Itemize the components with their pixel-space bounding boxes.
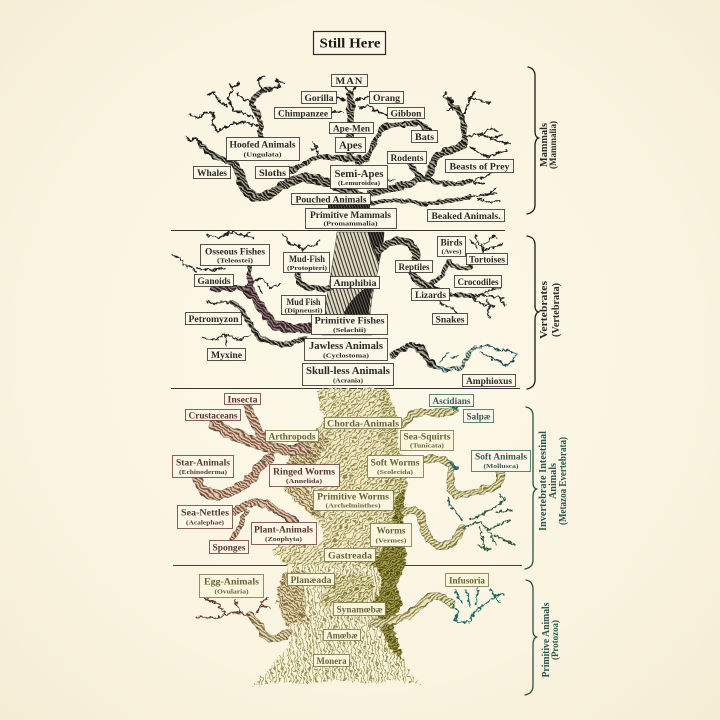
- trunk shading: top right: [368, 232, 384, 262]
- label: Amphioxus: Amphioxus: [466, 377, 512, 387]
- label: Ganoids: Ganoids: [198, 277, 231, 287]
- label: Rodents: [388, 152, 426, 164]
- label: Hoofed Animals: [226, 138, 300, 160]
- label: Soft Animals: (Mollusca): [484, 463, 518, 470]
- side label: protozoa: [541, 602, 560, 678]
- label: Birds: Birds: [440, 238, 463, 248]
- label: Mud-Fish: Mud-Fish: [289, 255, 326, 265]
- label: Beasts of Prey: [446, 160, 514, 172]
- label: Orang: [370, 92, 404, 104]
- label: Ringed Worms: [270, 464, 340, 486]
- label: Tortoises: Tortoises: [469, 256, 505, 266]
- label: Bats: [412, 130, 438, 143]
- label: Chimpanzee: Chimpanzee: [278, 110, 328, 120]
- label: Worms: [370, 524, 412, 546]
- label: Osseous Fishes: [200, 244, 270, 266]
- trunk: upper: [322, 232, 384, 335]
- label: Gorilla: Gorilla: [304, 94, 334, 104]
- label: Sea-Nettles: Sea-Nettles: [181, 508, 229, 518]
- label: Primitive Mammals: Primitive Mammals: [310, 211, 391, 221]
- branch: ganoids and osseous fishes: [173, 231, 314, 328]
- label: Primitive Mammals: [306, 208, 396, 228]
- branch: rodents: [380, 163, 492, 190]
- label: Jawless Animals: [304, 338, 388, 360]
- label: Ape-Men: Ape-Men: [333, 124, 371, 134]
- side label: protozoa: (Protozoa): [550, 620, 560, 660]
- title: Still Here: [320, 36, 380, 52]
- side label: mammals: (Mammalia): [548, 121, 558, 169]
- label: Petromyzon: Petromyzon: [188, 315, 239, 325]
- trunk: dark shading: [368, 490, 406, 566]
- label: Salpae: Salpæ: [466, 412, 491, 422]
- label: Primitive Mammals: (Promammalia): [324, 220, 378, 228]
- trunk: left brown shading: [277, 571, 310, 624]
- label: Whales: Whales: [197, 169, 227, 179]
- label: Infusoria: [446, 574, 488, 586]
- label: Ringed Worms: Ringed Worms: [273, 468, 335, 478]
- branch: egg-animals: [197, 598, 288, 639]
- label: Hoofed Animals: Hoofed Animals: [230, 140, 296, 150]
- panel: mammals: [186, 74, 514, 228]
- label: Planaeada: Planæada: [290, 576, 332, 586]
- label: Snakes: [432, 314, 468, 326]
- label: Mud Fish: [282, 296, 326, 314]
- trunk: lower right shading: [380, 623, 403, 660]
- divider: mammals and vertebrates: [171, 230, 505, 232]
- side label: mammals: [539, 121, 558, 169]
- label: Chorda-Animals: Chorda-Animals: [327, 420, 399, 430]
- label: Sea-Squirts: Sea-Squirts: [404, 432, 451, 442]
- label: Worms: Worms: [376, 526, 406, 536]
- label: Rodents: Rodents: [390, 154, 424, 164]
- label: Plant-Animals: (Zoophyta): [265, 536, 302, 543]
- label: Amphibia: [330, 276, 380, 289]
- branch: sloths and bats: [287, 123, 428, 172]
- label: Mud-Fish: [284, 252, 330, 272]
- trunk: red shading: [284, 434, 330, 520]
- panel: vertebrates: [173, 231, 516, 387]
- label: Birds: (Aves): [442, 248, 462, 256]
- branch: star-animals: [197, 458, 270, 495]
- branch: whales and hoofed animals: [186, 76, 365, 198]
- branch: mud fish: [283, 234, 330, 289]
- label: Sea-Nettles: (Acalephae): [186, 520, 224, 526]
- label: Myxine: Myxine: [211, 351, 242, 361]
- label: Infusoria: Infusoria: [449, 576, 485, 586]
- branch: worms: [403, 495, 515, 550]
- trunk: lower with roots: [252, 566, 422, 686]
- label: Sloths: Sloths: [259, 169, 286, 179]
- branch: infusoria: [373, 588, 503, 623]
- label: Sloths: [256, 166, 290, 179]
- label: Beaked Animals: Beaked Animals.: [432, 212, 500, 222]
- label: Insecta: [224, 394, 260, 406]
- label: Gastreada: Gastreada: [328, 552, 372, 562]
- side label: invertebrates: (Metazoa Evertebrata): [558, 437, 569, 525]
- label: Soft Worms: (Scolecida): [377, 469, 413, 476]
- branch: apes and man: [331, 84, 387, 153]
- label: Reptiles: Reptiles: [398, 263, 430, 273]
- label: Egg-Animals: [200, 574, 264, 598]
- label: Bats: Bats: [415, 133, 434, 143]
- brace: invertebrates: [525, 407, 537, 569]
- panel: protozoa: [197, 566, 503, 686]
- label: Synamoebae: Synamœbæ: [336, 606, 383, 616]
- label: Ganoids: [194, 274, 234, 287]
- label: Jawless Animals: Jawless Animals: [309, 341, 383, 352]
- label: Lizards: Lizards: [415, 291, 446, 301]
- label: Planaeada: [288, 574, 334, 586]
- label: Petromyzon: [186, 312, 242, 325]
- label: Gibbon: [388, 108, 424, 120]
- label: Arthropods: Arthropods: [268, 432, 316, 442]
- label: Primitive Worms: (Archelminthes): [326, 502, 380, 510]
- side label: vertebrates: Vertebrates: [539, 281, 550, 339]
- label: Myxine: [208, 348, 246, 361]
- side label: vertebrates: (Vertebrata): [551, 283, 562, 337]
- label: Apes: [336, 138, 366, 152]
- label: Hoofed Animals: (Ungulata): [244, 152, 282, 158]
- divider: vertebrates and invertebrates: [171, 388, 520, 390]
- branch: birds and tortoises: [432, 236, 503, 284]
- label: Star-Animals: (Echinoderma): [179, 469, 227, 476]
- label: Primitive Fishes: [312, 314, 388, 334]
- label: Mud-Fish: (Protopteri): [287, 265, 327, 272]
- branch: ascidians and salpae: [402, 404, 466, 424]
- brace: protozoa: [525, 580, 537, 695]
- label: Semi-Apes: Semi-Apes: [334, 169, 384, 180]
- side label: invertebrates: [538, 431, 569, 531]
- trunk: middle: [272, 389, 407, 566]
- trunk: mid band: [320, 575, 374, 606]
- label: Skull-less Animals: Skull-less Animals: [306, 366, 390, 377]
- label: Synamoebae: [334, 602, 386, 616]
- branch: amphioxus: [392, 345, 516, 369]
- label: Man: [332, 74, 368, 87]
- trunk join below pouched animals: [328, 203, 370, 209]
- branch: beaked animals: [372, 189, 500, 203]
- trunk shading: bottom: [343, 282, 374, 316]
- label: Monera: Monera: [316, 657, 347, 667]
- label: Gastreada: [324, 548, 376, 562]
- side label: invertebrates: Animals: [548, 463, 559, 499]
- label: Star-Animals: [172, 456, 234, 478]
- label: Plant-Animals: Plant-Animals: [254, 526, 313, 536]
- label: Semi-Apes: (Lemuroidea): [338, 180, 380, 187]
- label: Birds: [438, 236, 466, 256]
- label: Mud Fish: Mud Fish: [286, 298, 321, 308]
- label: Primitive Worms: Primitive Worms: [317, 492, 389, 502]
- label: Primitive Fishes: (Selachii): [333, 327, 366, 334]
- trunk: olive shading: [352, 389, 407, 566]
- label: Soft Worms: Soft Worms: [370, 458, 420, 468]
- label: Crustaceans: Crustaceans: [188, 412, 238, 422]
- branch: reptiles, lizards, snakes: [378, 241, 505, 318]
- label: Skull-less Animals: (Acrania): [333, 378, 363, 384]
- label: Amoebae: Amœbæ: [326, 632, 358, 642]
- label: Apes: Apes: [339, 140, 362, 152]
- branch: sea-nettles and sponges: [232, 502, 296, 540]
- label: Snakes: Snakes: [436, 316, 465, 326]
- title: [314, 32, 386, 54]
- label: Plant-Animals: [252, 522, 316, 544]
- label: Ascidians: Ascidians: [432, 397, 471, 407]
- label: Star-Animals: Star-Animals: [176, 458, 230, 468]
- side label: protozoa: Primitive Animals: [541, 602, 552, 678]
- brace: vertebrates: [527, 236, 539, 389]
- branch: petromyzon and myxine: [203, 301, 304, 346]
- label: Pouched Animals: Pouched Animals: [296, 196, 367, 206]
- label: Orang: Orang: [373, 94, 400, 104]
- side label: mammals: Mammals: [539, 123, 550, 167]
- trunk: right dark shading: [368, 566, 405, 623]
- label: Semi-Apes: [330, 166, 388, 188]
- label: Soft Worms: [368, 456, 424, 478]
- label: Sponges: [210, 540, 248, 554]
- label: Whales: [194, 166, 230, 179]
- label: Sponges: Sponges: [212, 544, 246, 554]
- side label: invertebrates: Invertebrate Intestinal: [538, 431, 549, 531]
- label: Skull-less Animals: [302, 364, 394, 386]
- label: Insecta: Insecta: [228, 396, 258, 406]
- label: Egg-Animals: Egg-Animals: [204, 578, 259, 588]
- label: Lizards: [412, 288, 450, 301]
- label: Ringed Worms: (Annelida): [286, 478, 322, 485]
- branch: beasts of prey: [370, 92, 510, 193]
- label: Amphibia: Amphibia: [334, 279, 377, 289]
- brace: mammals: [527, 67, 539, 214]
- label: Primitive Worms: [314, 490, 394, 510]
- label: Osseous Fishes: Osseous Fishes: [205, 248, 265, 258]
- label: Worms: (Vermes): [376, 538, 406, 544]
- label: Sea-Nettles: [178, 506, 232, 528]
- divider: invertebrates and protozoa: [173, 564, 522, 566]
- label: Crocodiles: Crocodiles: [458, 278, 499, 288]
- label: Primitive Fishes: Primitive Fishes: [314, 316, 385, 326]
- label: Man: MAN: [336, 77, 364, 87]
- label: Sea-Squirts: (Tunicata): [410, 442, 444, 450]
- label: Gibbon: Gibbon: [390, 110, 422, 120]
- panel: invertebrates: [172, 389, 530, 566]
- label: Sea-Squirts: [400, 430, 454, 450]
- label: Egg-Animals: (Ovularia): [214, 588, 248, 596]
- label: Soft Animals: [472, 450, 530, 472]
- label: Salpae: [464, 410, 494, 422]
- label: Jawless Animals: (Cyclostoma): [323, 352, 369, 360]
- side label: vertebrates: [539, 281, 562, 339]
- label: Mud Fish: (Dipneusti): [284, 308, 322, 314]
- branch: arthropods and crustaceans: [214, 404, 305, 450]
- label: Gorilla: [302, 92, 336, 104]
- label: Osseous Fishes: (Teleostei): [217, 258, 253, 264]
- branch: soft animals: [422, 459, 501, 495]
- label: Beasts of Prey: Beasts of Prey: [450, 162, 510, 172]
- label: Soft Animals: Soft Animals: [475, 452, 527, 462]
